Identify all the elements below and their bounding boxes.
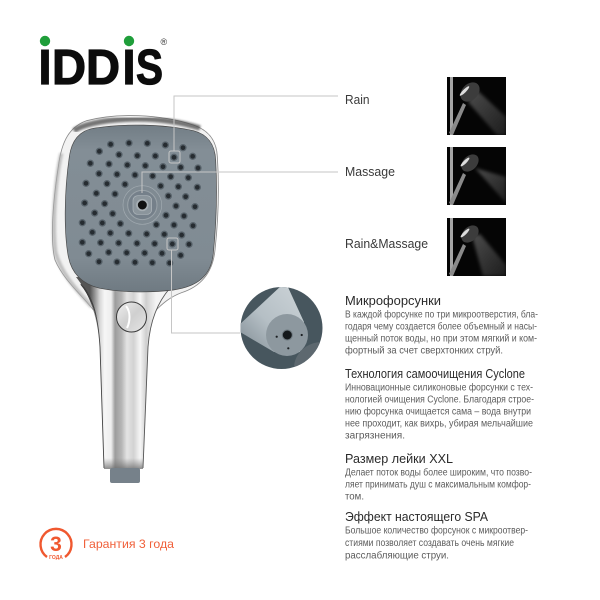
text block: Технология самоочищения Cyclone: нию форсунка очищается сама – вода внутри xyxy=(345,406,531,418)
text block: Размер лейки XXL: Размер лейки XXL xyxy=(345,451,453,466)
text block: Технология самоочищения Cyclone: Технология самоочищения Cyclone xyxy=(345,366,525,381)
warranty badge: 3 xyxy=(50,533,62,556)
logo: IDDIS: I xyxy=(122,41,136,95)
handle xyxy=(76,277,174,468)
text block: Технология самоочищения Cyclone: Инновационные силиконовые форсунки с тех- xyxy=(345,382,533,394)
warranty badge: ГОДА xyxy=(49,555,63,561)
text block: Эффект настоящего SPA: Большое количество форсунок с микроотвер- xyxy=(345,524,528,536)
thumbnail: rain mode xyxy=(447,77,506,135)
text block: Микрофорсунки: щенный поток воды, но при этом мягкий и ком- xyxy=(345,334,537,344)
text block: Размер лейки XXL: Делает поток воды более широким, что позво- xyxy=(345,466,532,478)
mode labels: Rain xyxy=(345,93,370,107)
text block: Микрофорсунки: фортный за счет сверхтонких струй. xyxy=(345,344,503,356)
logo: IDDIS: S xyxy=(136,41,163,95)
center nozzle xyxy=(123,186,162,224)
warranty badge: Гарантия 3 года xyxy=(83,537,174,551)
head face and nozzles xyxy=(65,125,217,292)
text block: Микрофорсунки xyxy=(345,293,538,356)
shower head product image xyxy=(52,116,218,483)
mode labels xyxy=(345,93,428,251)
callout lines and nozzle markers xyxy=(142,96,338,333)
logo: IDDIS xyxy=(38,36,168,95)
text block: Размер лейки XXL: том. xyxy=(345,492,364,502)
text block: Технология самоочищения Cyclone xyxy=(345,366,534,442)
text block: Микрофорсунки: Микрофорсунки xyxy=(345,293,441,308)
head rim xyxy=(52,116,218,310)
text block: Эффект настоящего SPA xyxy=(345,509,528,562)
text block: Микрофорсунки: годаря чему создается более объемный и насы- xyxy=(345,320,537,332)
text block: Размер лейки XXL xyxy=(345,451,532,502)
text block: Технология самоочищения Cyclone: нологией очищения Cyclone. Благодаря строе- xyxy=(345,394,534,406)
text block: Технология самоочищения Cyclone: нее проходит, как вихрь, убирая мельчайшие xyxy=(345,418,533,430)
mode labels: Rain&Massage xyxy=(345,237,428,251)
magnified nozzle circle xyxy=(240,287,322,369)
thumbnail: rain and massage mode xyxy=(447,218,506,276)
text block: Микрофорсунки: В каждой форсунке по три микроотверстия, бла- xyxy=(345,308,538,320)
thumbnail: massage mode xyxy=(447,147,506,205)
text block: Технология самоочищения Cyclone: загрязнения. xyxy=(345,430,405,442)
text block: Эффект настоящего SPA: расслабляющие струи. xyxy=(345,550,449,562)
logo: IDDIS: I xyxy=(38,41,52,95)
text block: Размер лейки XXL: ляет принимать душ с максимальным комфор- xyxy=(345,478,531,490)
text block: Эффект настоящего SPA: Эффект настоящего SPA xyxy=(345,509,488,524)
connector thread xyxy=(110,468,140,483)
warranty badge xyxy=(40,529,174,561)
logo: IDDIS: D xyxy=(86,41,120,95)
logo: IDDIS: ® xyxy=(160,37,168,47)
nozzles xyxy=(79,140,201,266)
text block: Эффект настоящего SPA: стиями позволяет создавать очень мягкие xyxy=(345,538,514,549)
logo: IDDIS: D xyxy=(52,41,86,95)
mode labels: Massage xyxy=(345,165,395,179)
handle button xyxy=(116,302,146,332)
